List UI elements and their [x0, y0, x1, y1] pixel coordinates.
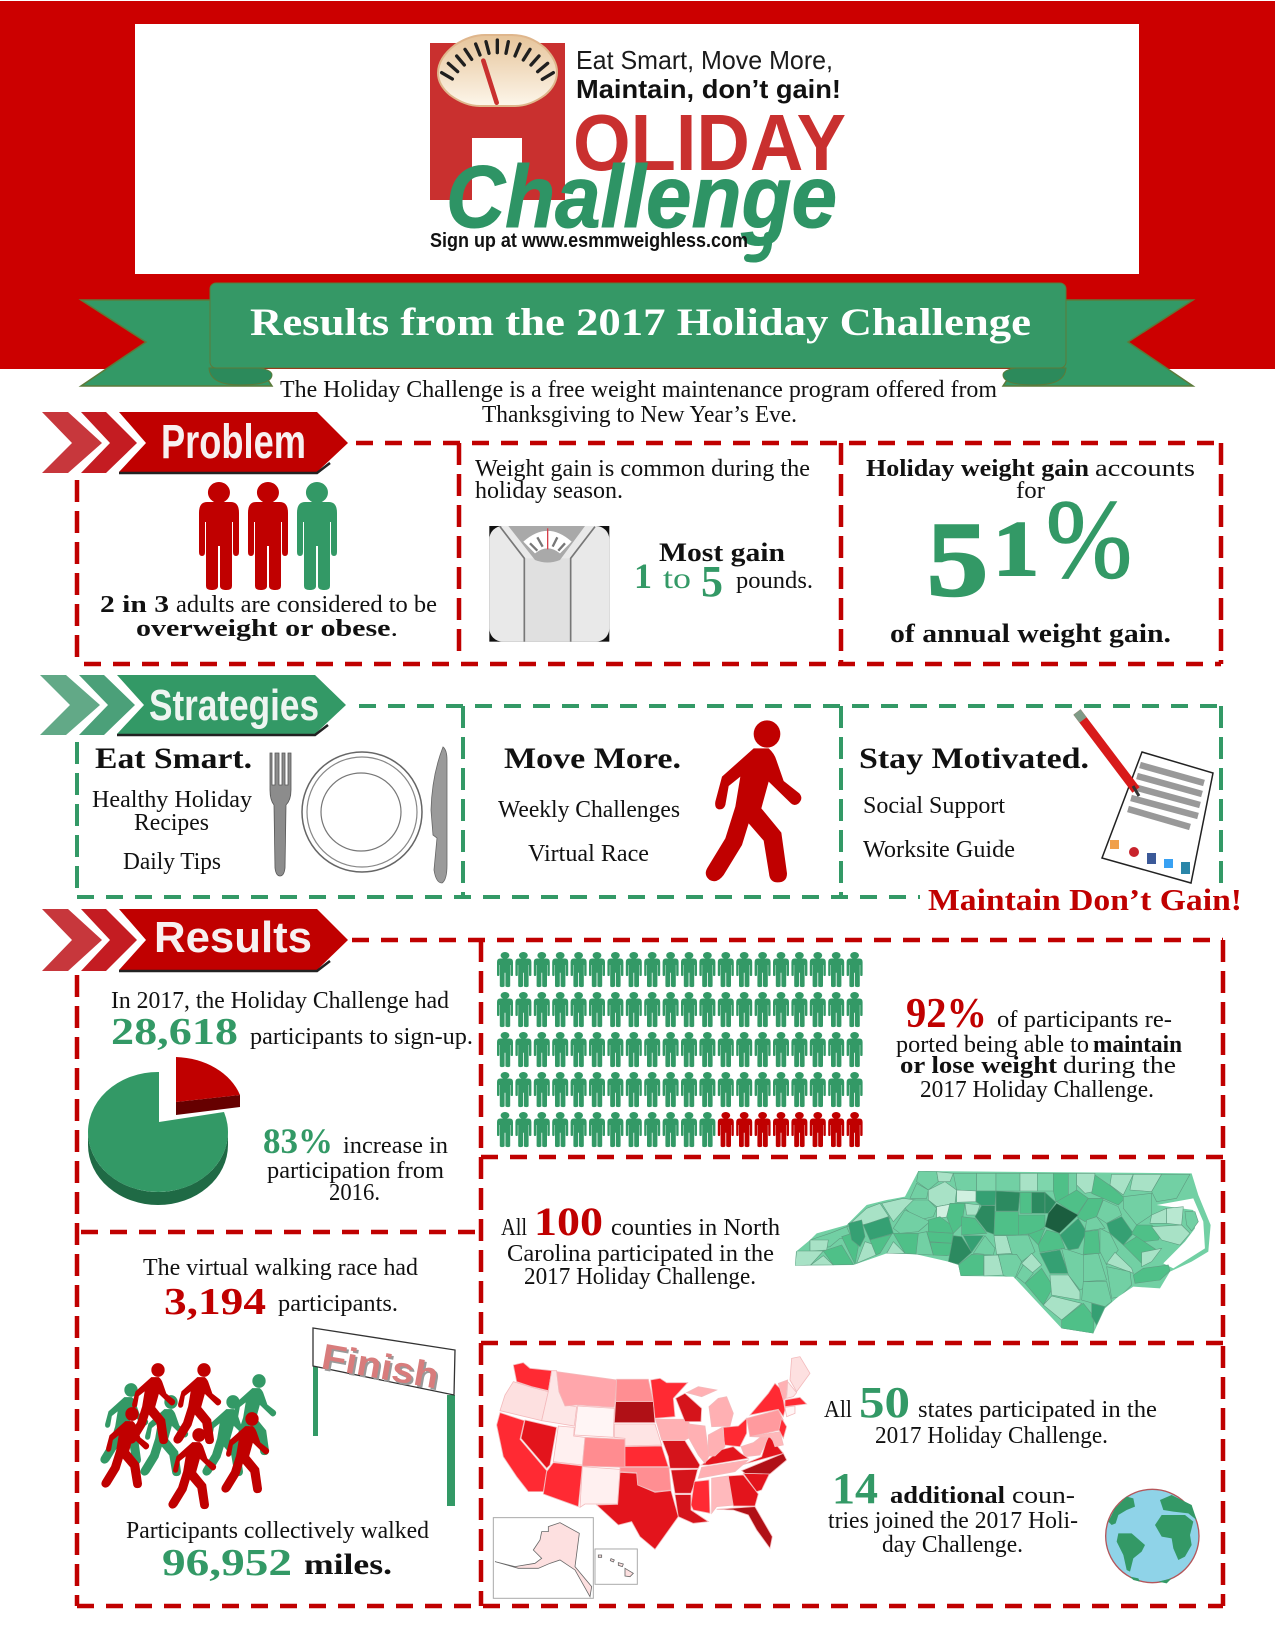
text: 28,618 participants: In 2017, the Holiday Challenge had	[111, 988, 449, 1014]
icon: finish sign	[313, 1328, 455, 1506]
text: holiday weight gain accounts for: accounts	[1095, 456, 1195, 482]
text: 3,194 participants: 3,194	[164, 1281, 266, 1323]
text: 100 counties	[501, 1199, 780, 1290]
text: 100 counties: counties in North	[611, 1215, 780, 1241]
text: 28,618 participants: 28,618	[111, 1011, 238, 1053]
text: 92 percent maintain: 2017 Holiday Challenge.	[920, 1077, 1154, 1103]
icon: globe	[1106, 1489, 1199, 1583]
text: 96,952 miles: miles.	[304, 1548, 392, 1581]
text: most gain 1 to 5 pounds: 1	[634, 556, 652, 596]
intro text: Thanksgiving to New Year’s Eve.	[482, 402, 797, 428]
heading: strategies chevron	[40, 675, 346, 735]
logo: slogan: Maintain, don’t gain!	[576, 74, 841, 104]
text: most gain 1 to 5 pounds: to	[663, 562, 691, 595]
logo: letter H block	[430, 43, 565, 200]
text: 14 countries	[828, 1464, 1078, 1558]
text: 50 states: states participated in the	[918, 1397, 1157, 1423]
text: 83 percent increase: increase in	[343, 1133, 448, 1159]
chart: united states map	[493, 1357, 810, 1598]
text: holiday weight gain accounts for: for	[1016, 478, 1045, 504]
inset: alaska	[493, 1518, 593, 1598]
text: 2 in 3 adults	[100, 592, 437, 642]
text: 2 in 3 adults: adults are considered to be	[176, 592, 437, 618]
big number: 51%	[927, 478, 1132, 618]
text: 50 states	[824, 1378, 1157, 1449]
text: 50 states: All	[824, 1397, 852, 1423]
text: holiday weight gain accounts for: Holiday weight gain	[866, 456, 1089, 482]
text: 28,618 participants: participants to sign-up.	[250, 1024, 473, 1050]
title ribbon	[81, 283, 1193, 386]
ribbon right tail	[1003, 300, 1193, 386]
text: 28,618 participants	[111, 988, 473, 1053]
text: 92 percent maintain: or lose weight	[900, 1053, 1057, 1079]
text: 100 counties: Carolina participated in the	[507, 1241, 774, 1267]
text: stay motivated: Social Support	[863, 793, 1005, 819]
text: 2 in 3 adults: 2 in 3	[100, 592, 169, 618]
text: 92 percent maintain: of participants re-	[997, 1007, 1172, 1033]
text: eat smart	[92, 742, 252, 875]
heading: results chevron	[42, 909, 348, 971]
heading: problem chevron	[42, 412, 348, 473]
text: stay motivated: Stay Motivated.	[859, 742, 1089, 775]
text: 83 percent increase: 83%	[263, 1121, 333, 1161]
text: 3,194 participants: The virtual walking race had	[143, 1255, 418, 1281]
panel: problem frame	[77, 443, 1221, 664]
text: 92 percent maintain	[896, 991, 1182, 1103]
text: move more	[498, 742, 681, 867]
callout: maintain don't gain: Maintain Don’t Gain!	[928, 882, 1242, 917]
text: 3,194 participants	[143, 1255, 418, 1323]
text: weight gain is common: holiday season.	[475, 478, 623, 504]
text: 92 percent maintain: ported being able to	[896, 1032, 1089, 1058]
icon: notepad and pencil	[1077, 712, 1213, 883]
icon: finish sign: Finish	[319, 1336, 442, 1396]
icon: walking figure	[706, 720, 801, 882]
text: 14 countries: day Challenge.	[882, 1532, 1023, 1558]
panel: results frame	[77, 940, 1223, 1606]
text: 14 countries: tries joined the 2017 Holi-	[828, 1508, 1078, 1534]
chart: pie 83 percent	[88, 1057, 240, 1205]
text: 83 percent increase: 2016.	[329, 1180, 380, 1206]
icon: group of walkers	[100, 1363, 276, 1509]
text: 83 percent increase: participation from	[267, 1158, 444, 1184]
text: eat smart: Recipes	[134, 810, 209, 836]
text: eat smart: Healthy Holiday	[92, 787, 252, 813]
icon: bathroom scale	[489, 526, 609, 642]
text: move more: Weekly Challenges	[498, 797, 680, 823]
logo: OLIDAY: OLIDAY	[573, 98, 846, 187]
big number: 51%: %	[1046, 478, 1132, 602]
text: 83 percent increase	[263, 1121, 448, 1206]
text: 96,952 miles	[126, 1518, 429, 1584]
text: most gain 1 to 5 pounds	[634, 538, 813, 606]
logo: scale dial	[438, 35, 557, 106]
logo: slogan: Eat Smart, Move More,	[576, 45, 833, 75]
big number: 51%: 1	[993, 505, 1039, 592]
heading: problem chevron: Problem	[161, 416, 306, 469]
title: Results from the 2017 Holiday Challenge	[250, 301, 1031, 344]
text: most gain 1 to 5 pounds: Most gain	[659, 538, 786, 567]
text: 3,194 participants: participants.	[278, 1291, 398, 1317]
text: stay motivated	[859, 742, 1089, 863]
icon: finish sign: Finish	[321, 1338, 444, 1398]
text: eat smart: Daily Tips	[123, 849, 221, 875]
big number: 51%: 5	[927, 501, 988, 618]
text: 100 counties: All	[501, 1215, 527, 1241]
intro text: The Holiday Challenge is a free weight maintenance program offered from	[280, 377, 997, 403]
text: weight gain is common	[475, 456, 810, 504]
chart: people grid 92 percent	[497, 952, 863, 1147]
text: weight gain is common: Weight gain is common during the	[475, 456, 810, 482]
heading: results chevron: Results	[154, 913, 312, 962]
text: most gain 1 to 5 pounds: 5	[701, 557, 723, 606]
text: 14 countries: additional	[890, 1483, 1005, 1509]
text: eat smart: Eat Smart.	[95, 742, 252, 775]
logo: sign up url: Sign up at www.esmmweighless.com	[430, 230, 748, 252]
text: 50 states: 50	[859, 1378, 910, 1427]
text: 50 states: 2017 Holiday Challenge.	[875, 1423, 1108, 1449]
icon: fork plate knife	[270, 747, 447, 883]
text: 92 percent maintain: 92%	[906, 991, 987, 1037]
text: 100 counties: 100	[534, 1199, 603, 1244]
icon: three people	[199, 482, 337, 590]
text: 96,952 miles: Participants collectively walked	[126, 1518, 429, 1544]
logo: Challenge: Challenge	[446, 147, 837, 246]
text: most gain 1 to 5 pounds: pounds.	[736, 568, 813, 594]
text: stay motivated: Worksite Guide	[863, 837, 1015, 863]
text: 14 countries: coun-	[1012, 1483, 1075, 1509]
ribbon left tail	[81, 300, 272, 386]
inset: hawaii	[595, 1549, 637, 1584]
logo panel	[135, 24, 1139, 274]
text: 2 in 3 adults: overweight or obese .	[136, 616, 398, 642]
text: 96,952 miles: 96,952	[162, 1542, 292, 1584]
text: 92 percent maintain: during the	[1063, 1053, 1176, 1079]
text: of annual weight gain: of annual weight gain.	[890, 619, 1171, 648]
text: holiday weight gain accounts for	[866, 456, 1195, 504]
text: move more: Move More.	[504, 742, 681, 775]
chart: north carolina county map	[790, 1165, 1223, 1338]
panel: strategies frame	[77, 706, 1221, 897]
logo: slogan	[576, 45, 841, 104]
text: move more: Virtual Race	[528, 841, 649, 867]
intro text	[280, 377, 997, 428]
heading: strategies chevron: Strategies	[149, 681, 319, 730]
text: 100 counties: 2017 Holiday Challenge.	[524, 1264, 756, 1290]
text: 92 percent maintain: maintain	[1093, 1032, 1182, 1058]
text: 14 countries: 14	[832, 1464, 878, 1513]
red header band	[0, 1, 1275, 369]
